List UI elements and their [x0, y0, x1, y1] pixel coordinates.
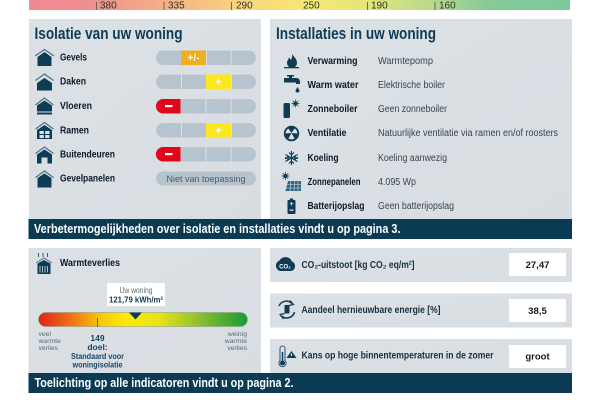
row: ramen	[36, 122, 256, 139]
row: batterijopslag: Geen batterijopslag	[378, 201, 454, 212]
energy scale bar: 160	[439, 0, 456, 12]
panel: aandeel hernieuwbare energie: Aandeel hernieuwbare energie [%]	[302, 305, 440, 316]
heading: installaties: Installaties in uw woning	[276, 25, 436, 43]
energy scale bar: 380	[100, 0, 117, 12]
row: zonneboiler: Zonneboiler	[308, 104, 358, 115]
label: veel warmte verlies: verlies	[38, 345, 59, 352]
row: zonneboiler	[284, 100, 448, 118]
row: gevels: Gevels	[60, 52, 87, 64]
panel: co2-uitstoot: CO₂-uitstoot [kg CO₂ eq/m²]	[302, 260, 414, 271]
value box: 27,47	[526, 260, 549, 271]
value box: groot	[525, 352, 550, 362]
row: warm water	[284, 75, 446, 92]
callout: uw woning: Uw woning	[120, 286, 152, 295]
row: zonneboiler: Geen zonneboiler	[378, 104, 448, 115]
banner: toelichting	[28, 373, 572, 393]
banner: verbetermogelijkheden: Verbetermogelijkheden over isolatie en installaties vindt u op pagina 3.	[34, 222, 400, 236]
energy scale bar	[29, 0, 570, 12]
panel: installaties in uw woning	[270, 19, 572, 219]
label: weinig warmte verlies: warmte	[224, 338, 247, 345]
value box	[509, 299, 566, 322]
row: daken: +	[215, 76, 222, 88]
row: verwarming: Verwarming	[308, 56, 358, 67]
banner: toelichting: Toelichting op alle indicatoren vindt u op pagina 2.	[34, 376, 294, 390]
banner: verbetermogelijkheden	[28, 219, 572, 239]
heat loss gradient bar	[38, 312, 248, 327]
row: ramen: Ramen	[60, 126, 89, 136]
label: weinig warmte verlies: verlies	[227, 345, 248, 352]
label: weinig warmte verlies	[224, 331, 248, 352]
value box	[509, 253, 566, 276]
panel: kans op hoge binnentemperaturen: Kans op hoge binnentemperaturen in de zomer	[302, 350, 494, 362]
callout: uw woning: 121,79 kWh/m²	[109, 296, 163, 304]
label: weinig warmte verlies: weinig	[227, 331, 247, 338]
label: veel warmte verlies	[38, 331, 61, 352]
panel: co2-uitstoot	[270, 248, 572, 282]
label: veel warmte verlies: veel	[38, 331, 51, 338]
row: buitendeuren: Buitendeuren	[60, 150, 115, 160]
row: daken: Daken	[60, 76, 86, 88]
icon: thermometer with warning	[279, 346, 296, 367]
label: veel warmte verlies: warmte	[38, 338, 61, 345]
label: doel 149: doel:	[87, 342, 108, 352]
row: koeling	[285, 151, 447, 165]
row: daken	[36, 74, 256, 90]
icon: co2 cloud: CO₂	[279, 264, 291, 270]
row: gevels	[35, 50, 256, 66]
row: buitendeuren	[36, 147, 256, 164]
label: doel 149	[71, 333, 125, 370]
row: zonnepanelen: 4.095 Wp	[378, 177, 416, 188]
row: warm water: Elektrische boiler	[378, 80, 446, 91]
energy scale bar: 250	[303, 0, 320, 12]
icon: house with heat	[36, 253, 52, 274]
row: gevels: +/-	[188, 53, 199, 64]
panel: warmteverlies	[28, 248, 261, 373]
value box: 38,5	[528, 306, 547, 317]
row: gevelpanelen	[36, 171, 256, 188]
label: doel 149: Standaard voor	[71, 351, 125, 361]
row: ventilatie: Ventilatie	[308, 128, 347, 139]
label: doel 149: 149	[90, 333, 105, 343]
row: verwarming: Warmtepomp	[378, 56, 433, 67]
row: gevelpanelen: Niet van toepassing	[166, 174, 246, 185]
energy scale bar: 190	[371, 0, 388, 12]
value box	[509, 345, 566, 368]
row: koeling: Koeling	[308, 153, 338, 164]
row: ramen: +	[215, 125, 222, 137]
panel: aandeel hernieuwbare energie	[270, 294, 572, 328]
row: ventilatie: Natuurlijke ventilatie via ramen en/of roosters	[378, 128, 558, 139]
callout: uw woning	[107, 283, 165, 306]
row: zonnepanelen	[282, 172, 416, 191]
energy scale bar: 290	[236, 0, 253, 12]
row: koeling: Koeling aanwezig	[378, 153, 447, 164]
icon: co2 cloud	[276, 257, 295, 271]
label: doel 149: woningisolatie	[72, 360, 123, 370]
heading: isolatie: Isolatie van uw woning	[34, 25, 182, 43]
icon: renewable arrows	[279, 300, 294, 319]
panel: isolatie van uw woning	[29, 19, 261, 219]
row: verwarming	[284, 54, 433, 68]
row: ventilatie	[285, 127, 558, 140]
row: vloeren	[36, 98, 256, 114]
panel: kans op hoge binnentemperaturen	[270, 339, 572, 373]
row: warm water: Warm water	[308, 80, 359, 91]
row: batterijopslag: Batterijopslag	[308, 201, 364, 212]
row: zonnepanelen: Zonnepanelen	[308, 177, 360, 188]
row: batterijopslag	[288, 198, 454, 214]
row: vloeren: Vloeren	[60, 101, 92, 112]
heading: warmteverlies: Warmteverlies	[60, 258, 120, 269]
row: gevelpanelen: Gevelpanelen	[60, 174, 115, 184]
energy scale bar: 335	[168, 0, 185, 12]
